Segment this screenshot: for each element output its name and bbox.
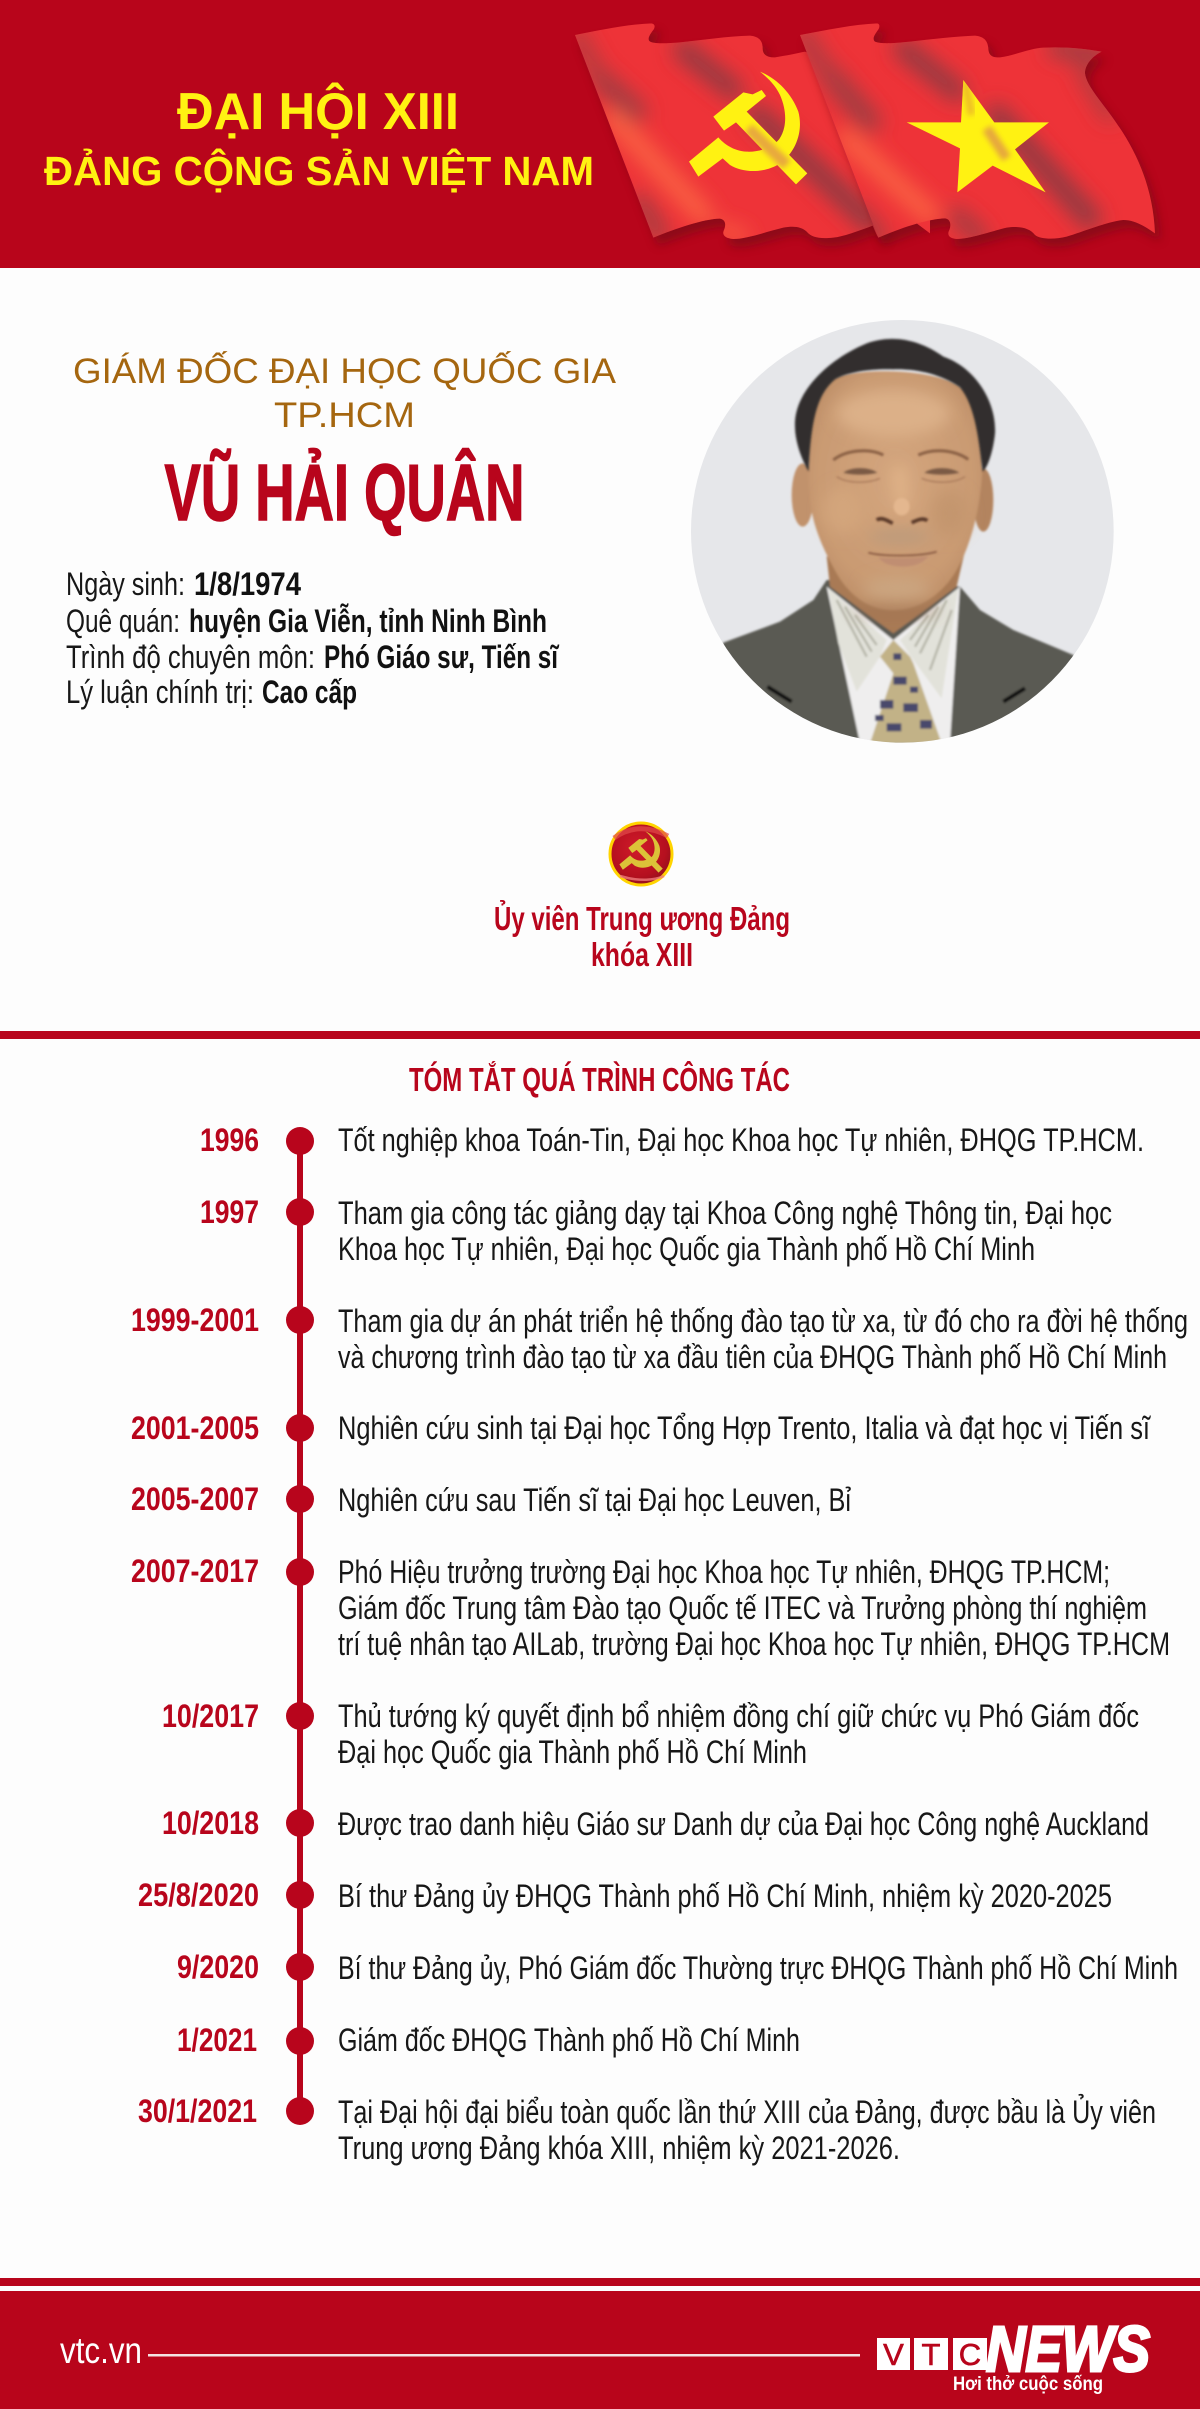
personal details: Ngày sinh:: [66, 566, 185, 602]
personal details: [66, 566, 560, 710]
timeline entry: 1999-2001: 1999-2001: [131, 1302, 259, 1338]
timeline entry: 1997: [200, 1194, 1112, 1267]
timeline entry: 10/2017: [162, 1698, 1139, 1770]
personal details: Cao cấp: [262, 674, 357, 710]
timeline entry: 1996: 1996: [200, 1122, 259, 1158]
timeline entry: 9/2020: 9/2020: [177, 1949, 259, 1985]
personal details: Phó Giáo sư, Tiến sĩ: [324, 639, 560, 675]
personal details: Lý luận chính trị:: [66, 674, 254, 710]
timeline entry: 2007-2017: [131, 1553, 1170, 1662]
personal details: Trình độ chuyên môn:: [66, 639, 315, 675]
soft facial shading: [823, 390, 968, 613]
logo: VTC News: NEWS: [986, 2313, 1150, 2385]
timeline entry: 1997: Khoa học Tự nhiên, Đại học Quốc gia Thành phố Hồ Chí Minh: [338, 1231, 1035, 1267]
personal details: 1/8/1974: [194, 566, 301, 602]
timeline entry: 1/2021: 1/2021: [177, 2022, 257, 2058]
logo: VTC News: V: [883, 2337, 904, 2372]
source site: vtc.vn: [60, 2330, 142, 2371]
timeline entry: 10/2017: Đại học Quốc gia Thành phố Hồ Chí Minh: [338, 1734, 807, 1770]
icon: party emblem: [610, 823, 672, 885]
timeline entry: 1999-2001: [131, 1302, 1188, 1375]
logo: VTC News: Hơi thở cuộc sống: [953, 2374, 1103, 2395]
timeline entry: 2005-2007: Nghiên cứu sau Tiến sĩ tại Đại học Leuven, Bỉ: [338, 1482, 851, 1518]
timeline entry: 2001-2005: 2001-2005: [131, 1410, 259, 1446]
timeline entry: 10/2018: 10/2018: [162, 1805, 259, 1841]
timeline entry: 30/1/2021: [138, 2093, 1156, 2166]
section heading: career summary: TÓM TẮT QUÁ TRÌNH CÔNG TÁC: [409, 1060, 790, 1098]
timeline entry: 2005-2007: [131, 1481, 851, 1518]
logo: VTC News: C: [959, 2337, 981, 2372]
timeline entry: 1/2021: Giám đốc ĐHQG Thành phố Hồ Chí Minh: [338, 2022, 800, 2058]
facial features: [795, 339, 995, 567]
timeline entry: 2005-2007: 2005-2007: [131, 1481, 259, 1517]
timeline entry: 30/1/2021: Trung ương Đảng khóa XIII, nhiệm kỳ 2021-2026.: [338, 2130, 900, 2166]
membership caption: [494, 900, 790, 973]
position title: [73, 351, 617, 435]
personal details: Quê quán:: [66, 603, 180, 639]
timeline entry: 25/8/2020: 25/8/2020: [138, 1877, 259, 1913]
personal details: huyện Gia Viễn, tỉnh Ninh Bình: [189, 603, 547, 639]
header title: ĐẠI HỘI XIII: [177, 82, 459, 141]
footer band: [0, 2291, 1200, 2409]
portrait photo: [680, 320, 1120, 750]
header title: [44, 82, 594, 194]
flag: party hammer and sickle: [570, 15, 903, 248]
timeline entry: 30/1/2021: 30/1/2021: [138, 2093, 257, 2129]
membership caption: Ủy viên Trung ương Đảng: [494, 900, 790, 937]
icon: hammer and sickle: [689, 72, 808, 184]
header title: ĐẢNG CỘNG SẢN VIỆT NAM: [44, 148, 594, 194]
membership caption: khóa XIII: [591, 936, 693, 973]
timeline entry: 2007-2017: 2007-2017: [131, 1553, 259, 1589]
header banner: [0, 0, 1200, 268]
career timeline: [131, 1122, 1188, 2166]
icon: star: [903, 78, 1050, 195]
logo: VTC News: [877, 2313, 1150, 2395]
position title: GIÁM ĐỐC ĐẠI HỌC QUỐC GIA: [73, 351, 617, 391]
timeline entry: 10/2017: 10/2017: [162, 1698, 259, 1734]
timeline entry: 1997: 1997: [200, 1194, 259, 1230]
logo: VTC News: T: [922, 2337, 941, 2372]
timeline entry: 1/2021: [177, 2022, 800, 2058]
position title: TP.HCM: [274, 396, 415, 435]
flag: national gold star: [790, 15, 1170, 248]
name heading: VŨ HẢI QUÂN: [164, 448, 524, 537]
